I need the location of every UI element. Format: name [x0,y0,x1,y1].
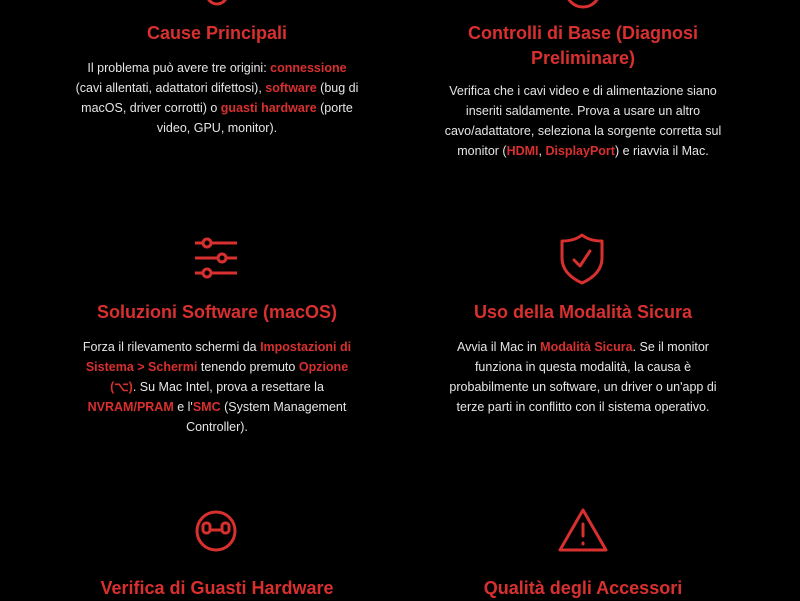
icon: top left partial [207,0,227,6]
title: modalita sicura: Uso della Modalità Sicura [474,302,692,322]
title: cause principali: Cause Principali [147,23,287,43]
icon: warning triangle [558,508,608,552]
title: guasti hardware: Verifica di Guasti Hardware [100,578,334,598]
icon: shield check [560,234,604,284]
icon: sliders [195,238,237,278]
title: soluzioni software: Soluzioni Software (macOS) [97,302,337,322]
text: modalita sicura: Avvia il Mac in Modalità Sicura. Se il monitor funziona in questa modalità, la causa è probabilmente un software, un driver o un'app di terze parti in conflitto con il sistema operativo. [449,340,717,414]
text: cause: Il problema può avere tre origini: connessione (cavi allentati, adattatori difettosi), software (bug di macOS, driver corrotti) o guasti hardware (porte video, GPU, monitor). [76,61,358,135]
title: qualita accessori: Qualità degli Accessori [484,578,682,598]
icon: hardware face [196,510,236,552]
text: soluzioni: Forza il rilevamento schermi da Impostazioni di Sistema > Schermi tenendo premuto Opzione (⌥). Su Mac Intel, prova a resettare la NVRAM/PRAM e l'SMC (System Management Controller). [83,340,351,434]
title: controlli di base: Controlli di Base (Diagnosi Preliminare) [468,23,698,68]
text: controlli: Verifica che i cavi video e di alimentazione siano inseriti saldamente. Prova a usare un altro cavo/adattatore, seleziona la sorgente corretta sul monitor (HDMI, DisplayPort) e riavvia il Mac. [445,84,721,158]
icon: top right partial [568,0,598,8]
